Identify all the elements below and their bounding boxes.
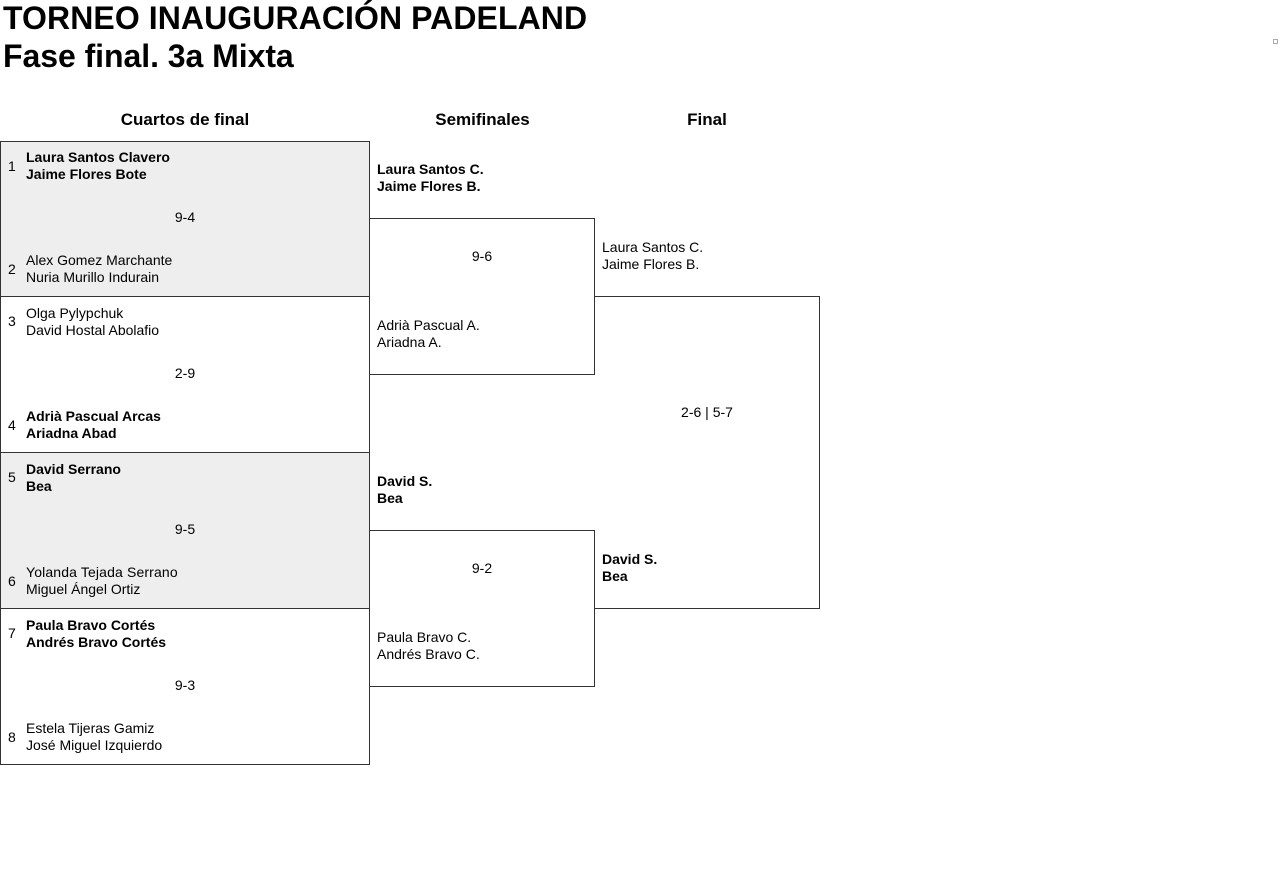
semifinal team 4 xyxy=(377,629,480,662)
team 8: José Miguel Izquierdo xyxy=(26,737,162,753)
title: TORNEO INAUGURACIÓN PADELAND xyxy=(3,0,587,36)
team 5: Bea xyxy=(26,478,52,494)
panel: final xyxy=(595,296,820,609)
semifinal team 3 xyxy=(377,473,432,506)
team 2: Alex Gomez Marchante xyxy=(26,252,172,268)
panel: semifinal 2 xyxy=(369,530,595,687)
team 3 xyxy=(26,305,159,338)
heading: cuartos de final: Cuartos de final xyxy=(121,110,249,129)
score SF1: 9-6 xyxy=(472,248,492,264)
panel: quarterfinal 1 xyxy=(0,141,370,297)
score QF2: 2-9 xyxy=(175,365,195,381)
semifinal team 4: Paula Bravo C. xyxy=(377,629,471,645)
score QF4: 9-3 xyxy=(175,677,195,693)
seed 1: 1 xyxy=(8,158,16,174)
semifinal team 2: Ariadna A. xyxy=(377,334,442,350)
team 4 xyxy=(26,408,161,441)
team 4: Adrià Pascual Arcas xyxy=(26,408,161,424)
team 4: Ariadna Abad xyxy=(26,425,116,441)
panel: quarterfinal 3 xyxy=(0,452,370,609)
semifinal team 3: Bea xyxy=(377,490,403,506)
final team 1: Jaime Flores B. xyxy=(602,256,699,272)
final team 1 xyxy=(602,239,703,272)
panel: quarterfinal 4 xyxy=(0,608,370,765)
seed 2: 2 xyxy=(8,261,16,277)
score QF3: 9-5 xyxy=(175,521,195,537)
semifinal team 3: David S. xyxy=(377,473,432,489)
seed 6: 6 xyxy=(8,573,16,589)
team 1: Jaime Flores Bote xyxy=(26,166,147,182)
title xyxy=(3,0,587,74)
team 1 xyxy=(26,149,170,182)
final team 2: David S. xyxy=(602,551,657,567)
panel: quarterfinal 2 xyxy=(0,296,370,453)
semifinal team 4: Andrés Bravo C. xyxy=(377,646,480,662)
team 6: Miguel Ángel Ortiz xyxy=(26,581,140,597)
team 1: Laura Santos Clavero xyxy=(26,149,170,165)
team 8: Estela Tijeras Gamiz xyxy=(26,720,154,736)
panel: semifinal 1 xyxy=(369,218,595,375)
final team 1: Laura Santos C. xyxy=(602,239,703,255)
team 3: Olga Pylypchuk xyxy=(26,305,123,321)
team 2: Nuria Murillo Indurain xyxy=(26,269,159,285)
seed 4: 4 xyxy=(8,417,16,433)
team 5: David Serrano xyxy=(26,461,121,477)
team 6: Yolanda Tejada Serrano xyxy=(26,564,178,580)
seed 7: 7 xyxy=(8,625,16,641)
team 7: Paula Bravo Cortés xyxy=(26,617,155,633)
title: Fase final. 3a Mixta xyxy=(3,38,294,74)
seed 3: 3 xyxy=(8,313,16,329)
team 5 xyxy=(26,461,121,494)
seed 8: 8 xyxy=(8,729,16,745)
team 6 xyxy=(26,564,178,597)
team 7: Andrés Bravo Cortés xyxy=(26,634,166,650)
team 3: David Hostal Abolafio xyxy=(26,322,159,338)
semifinal team 1 xyxy=(377,161,484,194)
semifinal team 2 xyxy=(377,317,480,350)
team 2 xyxy=(26,252,172,285)
seed 5: 5 xyxy=(8,469,16,485)
final team 2: Bea xyxy=(602,568,628,584)
final team 2 xyxy=(602,551,657,584)
semifinal team 1: Laura Santos C. xyxy=(377,161,484,177)
semifinal team 2: Adrià Pascual A. xyxy=(377,317,480,333)
semifinal team 1: Jaime Flores B. xyxy=(377,178,480,194)
heading: final: Final xyxy=(687,110,727,129)
score SF2: 9-2 xyxy=(472,560,492,576)
icon: small square xyxy=(1273,39,1278,44)
team 7 xyxy=(26,617,166,650)
score QF1: 9-4 xyxy=(175,209,195,225)
score final: 2-6 | 5-7 xyxy=(681,404,733,420)
team 8 xyxy=(26,720,162,753)
heading: semifinales: Semifinales xyxy=(435,110,530,129)
